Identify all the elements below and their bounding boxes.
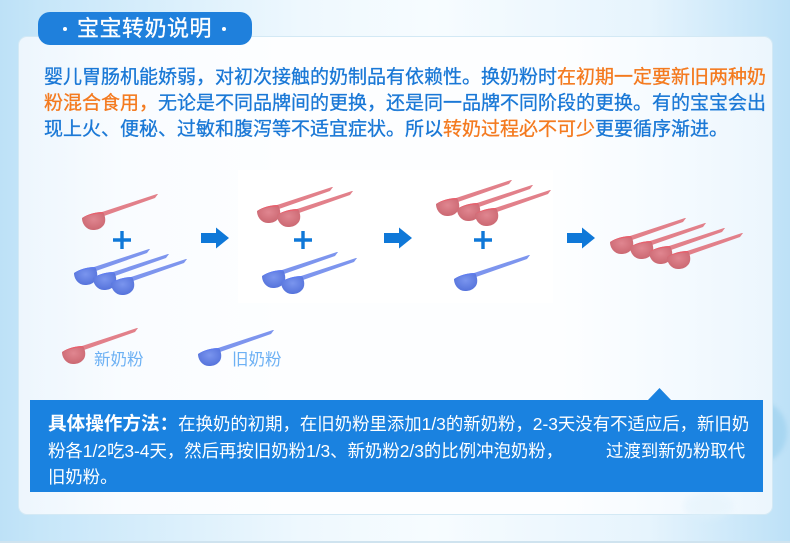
callout: method: 具体操作方法：在换奶的初期，在旧奶粉里添加1/3的新奶粉，2-3天没有不适应后，新旧奶 [48, 413, 749, 434]
background bubble: lower card [683, 492, 733, 520]
legend label: old formula: 旧奶粉 [232, 351, 282, 369]
callout: method [30, 400, 763, 492]
intro text: 现上火、便秘、过敏和腹泻等不适宜症状。所以转奶过程必不可少更要循序渐进。 [44, 119, 728, 140]
intro text [44, 66, 766, 140]
step 2 spoons [257, 187, 357, 294]
callout: method: 粉各1/2吃3-4天，然后再按旧奶粉1/3、新奶粉2/3的比例冲泡奶粉， 过渡到新奶粉取代 [48, 440, 745, 460]
callout: method: 旧奶粉。 [48, 467, 118, 487]
heading pill: 宝宝转奶说明 [77, 16, 212, 41]
heading pill [38, 12, 252, 45]
intro text: 婴儿胃肠机能娇弱，对初次接触的奶制品有依赖性。换奶粉时在初期一定要新旧两种奶 [44, 67, 766, 88]
arrow 3 [567, 228, 595, 248]
step 2 and 3 white backdrop [238, 170, 553, 303]
arrow 1 [201, 228, 229, 248]
arrow 2 [384, 228, 412, 248]
step 3 spoons [436, 180, 551, 291]
bottom edge strip [0, 541, 790, 543]
callout pointer [648, 388, 671, 400]
diagram: spoon steps [62, 180, 743, 366]
legend icon: old formula spoon [198, 330, 274, 366]
step 1 spoons [74, 194, 187, 295]
step 4 spoons [610, 218, 743, 269]
intro text: 粉混合食用，无论是不同品牌间的更换，还是同一品牌不同阶段的更换。有的宝宝会出 [44, 93, 766, 114]
background bubble: right [735, 402, 787, 462]
legend icon: new formula spoon [62, 328, 138, 364]
legend label: new formula: 新奶粉 [94, 351, 144, 369]
